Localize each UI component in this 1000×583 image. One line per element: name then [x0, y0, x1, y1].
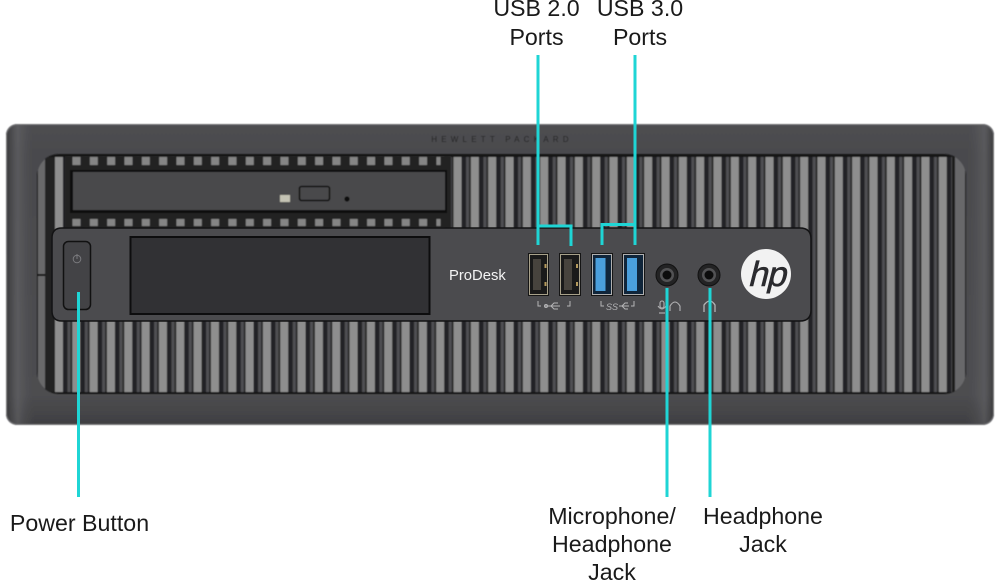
label: Headphone Jack: Jack	[739, 531, 787, 557]
headphone symbol	[704, 301, 715, 312]
eject button	[300, 186, 330, 200]
USB 3.0 symbol: SS	[606, 302, 618, 312]
label: USB 3.0 Ports: Ports	[613, 24, 667, 50]
label: Microphone/Headphone Jack: Headphone	[552, 531, 672, 557]
blank bay cover	[130, 237, 430, 314]
ventilation grille	[37, 154, 966, 394]
USB 3.0 port right	[622, 253, 645, 296]
callout line: microphone jack	[666, 288, 668, 497]
microphone headphone jack	[656, 264, 678, 286]
eject pinhole	[344, 196, 350, 202]
power button	[64, 242, 90, 310]
label: Power Button: Power Button	[10, 510, 149, 536]
USB 2.0 symbol	[538, 301, 570, 309]
microphone and headphone symbol	[658, 301, 680, 313]
ProDesk label: ProDesk	[449, 268, 506, 284]
callout bracket: USB 2.0	[538, 55, 571, 246]
HP logo: hp	[746, 254, 793, 294]
control panel	[52, 228, 811, 321]
drive LED	[280, 195, 290, 202]
callout line: headphone jack	[708, 288, 712, 497]
label: Microphone/Headphone Jack: Microphone/	[548, 503, 676, 529]
optical drive bay	[65, 156, 451, 228]
callout line: power button	[77, 292, 80, 497]
label: USB 2.0 Ports: Ports	[509, 24, 564, 50]
USB 2.0 port right	[559, 253, 581, 296]
label: Headphone Jack: Headphone	[703, 503, 823, 529]
callout bracket: USB 3.0	[602, 55, 635, 245]
brand engraving: HEWLETT PACKARD	[431, 135, 573, 144]
USB 3.0 symbol	[601, 301, 634, 312]
USB 3.0 port left	[591, 253, 613, 296]
headphone jack	[698, 264, 720, 286]
USB 2.0 port left	[528, 253, 549, 296]
